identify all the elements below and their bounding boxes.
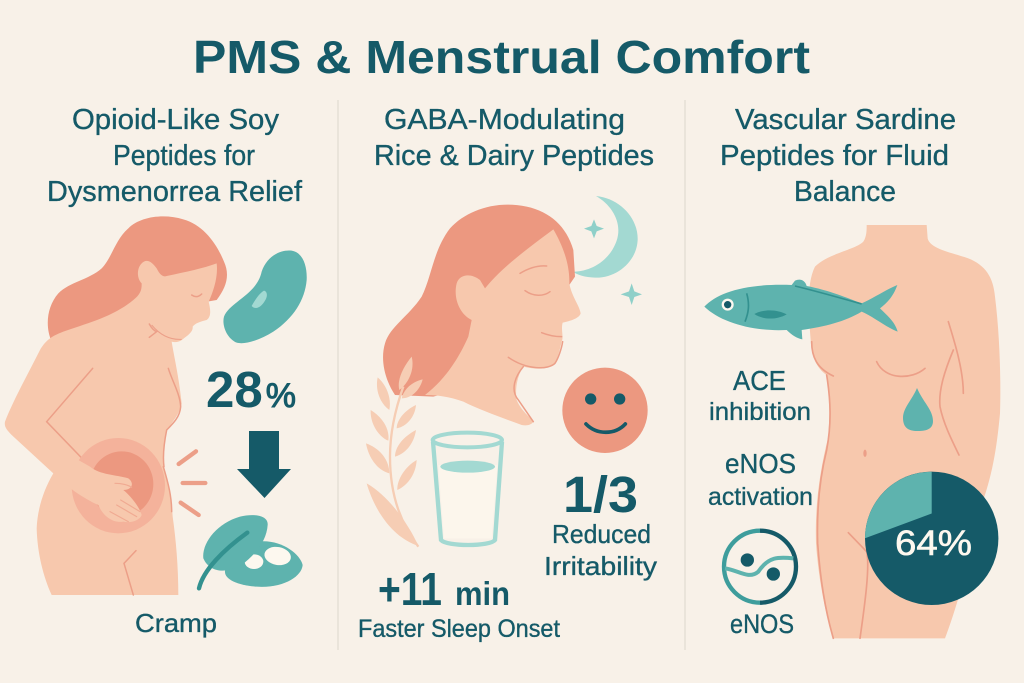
chart: 64% pie: 64%	[895, 524, 972, 563]
stat: +11 min faster sleep onset: min	[455, 575, 510, 612]
icon: water drop	[903, 388, 933, 431]
heading: GABA peptides: GABA-Modulating	[384, 104, 625, 136]
heading: sardine peptides: Vascular Sardine	[735, 104, 956, 136]
icon: moon and stars	[573, 196, 642, 305]
panel: soy peptides	[5, 104, 307, 638]
label: eNOS: eNOS	[730, 609, 794, 639]
heading: soy peptides	[47, 104, 303, 208]
stat: 1/3 reduced irritability: Irritability	[544, 551, 657, 581]
chart: 64% pie	[865, 472, 998, 605]
heading: GABA peptides: Rice & Dairy Peptides	[374, 140, 654, 172]
heading: sardine peptides	[720, 104, 956, 208]
heading: soy peptides: Peptides for	[113, 140, 255, 172]
label: ACE inhibition: ACE	[733, 365, 786, 396]
label: ACE inhibition: inhibition	[709, 398, 811, 426]
label: eNOS activation: activation	[708, 483, 813, 511]
heading: soy peptides: Dysmenorrea Relief	[47, 176, 303, 208]
heading: sardine peptides: Peptides for Fluid	[720, 140, 949, 172]
stat: 1/3 reduced irritability: Reduced	[552, 519, 651, 549]
label: cramp: Cramp	[135, 608, 217, 638]
stat: +11 min faster sleep onset: +11	[378, 563, 442, 615]
stat: 1/3 reduced irritability: 1/3	[563, 466, 638, 523]
icon: rice plant	[366, 357, 423, 547]
illustration: woman holding abdomen	[5, 216, 227, 595]
icon: eNOS vessel	[724, 531, 796, 603]
arrow: down	[237, 431, 291, 498]
panel: GABA peptides	[358, 104, 657, 643]
panel: sardine peptides	[704, 104, 1000, 639]
illustration: woman face profile	[383, 205, 581, 425]
icon: soy pod	[199, 515, 303, 588]
label: eNOS activation: eNOS	[725, 448, 796, 479]
label: ACE inhibition	[709, 365, 811, 426]
heading: soy peptides: Opioid-Like Soy	[72, 104, 280, 136]
label: eNOS activation	[708, 448, 813, 511]
stat: +11 min faster sleep onset	[358, 563, 560, 643]
stat: +11 min faster sleep onset: Faster Sleep Onset	[358, 615, 560, 643]
icon: smiley	[562, 368, 648, 453]
heading: sardine peptides: Balance	[794, 176, 896, 208]
heading: GABA peptides	[374, 104, 654, 172]
stat: 1/3 reduced irritability	[544, 466, 657, 581]
title: PMS & Menstrual Comfort	[193, 31, 810, 83]
illustration: torso	[809, 225, 1000, 638]
icon: glass of milk	[433, 433, 502, 545]
stat: 28%: 28%	[206, 361, 296, 418]
icon: sardine	[704, 280, 898, 339]
icon: soybean	[223, 251, 307, 343]
